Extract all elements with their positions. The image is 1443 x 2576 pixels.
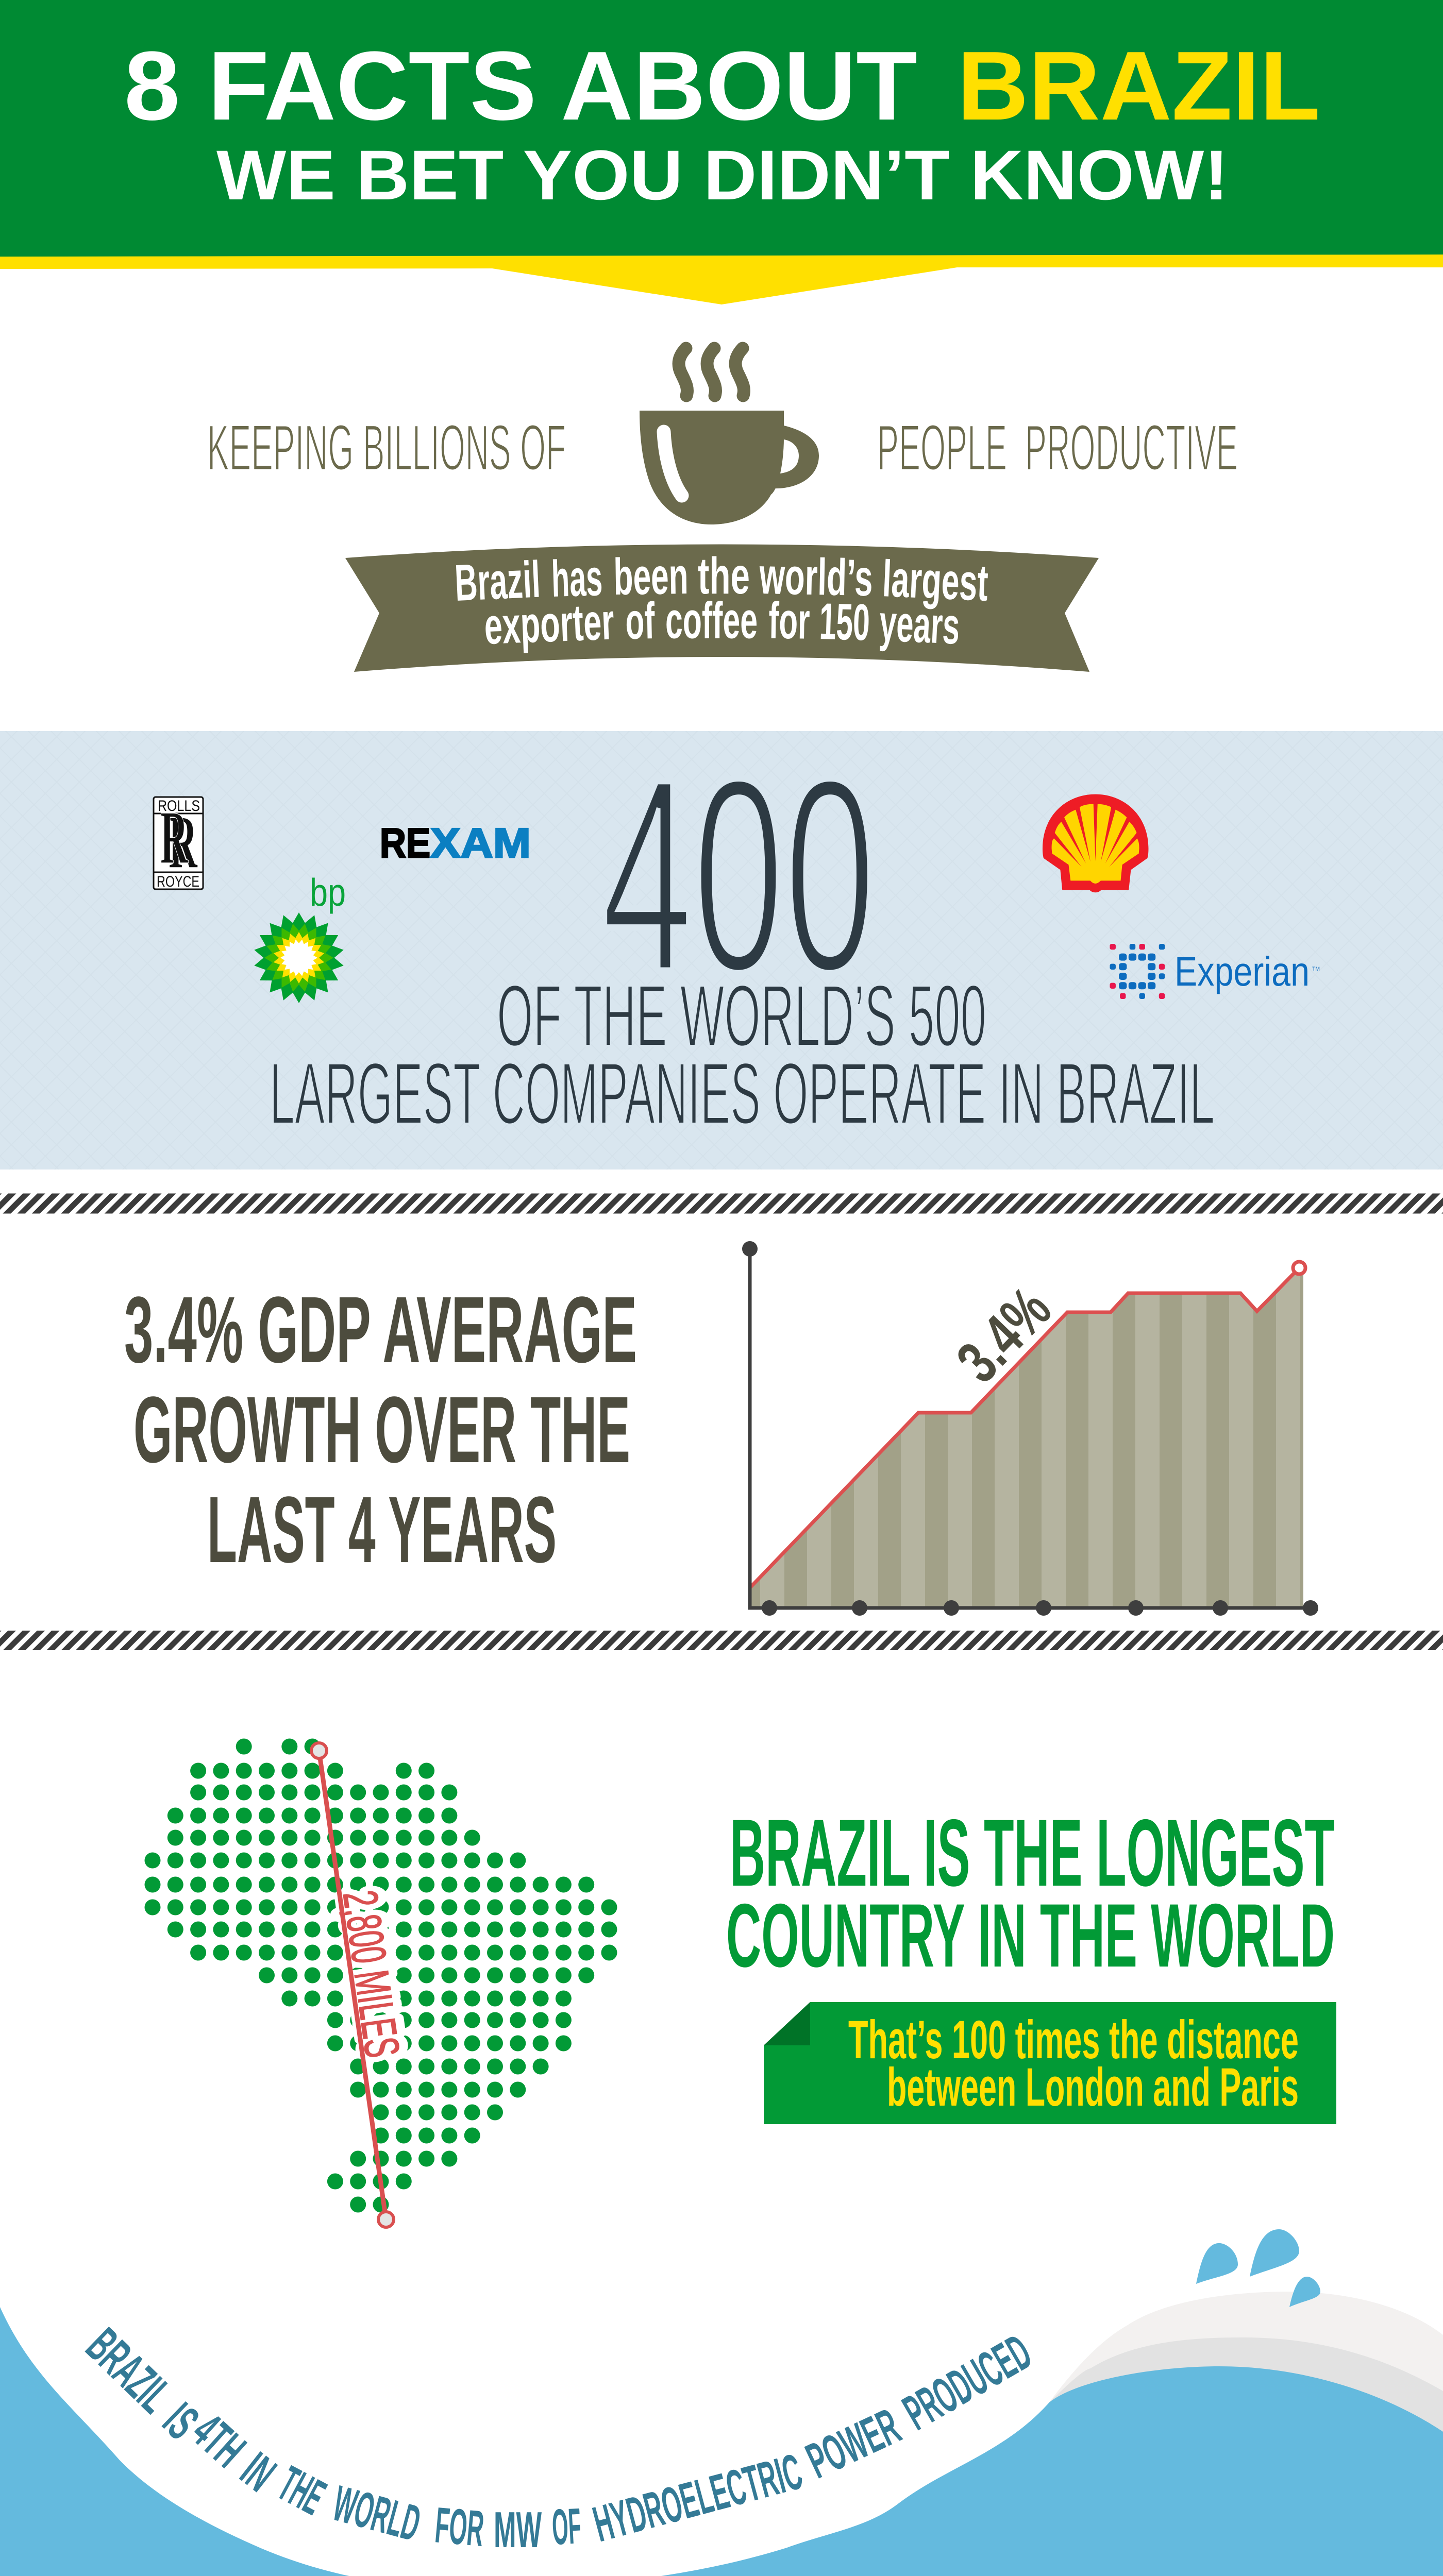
wave foam light layer (1049, 2292, 1443, 2473)
logo: rolls royce: R (169, 800, 198, 885)
banner text line 1 (454, 547, 989, 612)
logo: rolls royce: ROYCE (157, 873, 199, 890)
panel: coffee fact (207, 348, 1238, 672)
curved text: hydroelectric fact: PRODUCED (894, 2323, 1041, 2441)
distance label 2,800 miles: 2,800 MILES (333, 1887, 410, 2061)
curved text: hydroelectric fact: BRAZIL (76, 2317, 183, 2424)
curved text: hydroelectric fact: MW (494, 2501, 542, 2558)
icon: water drops (1196, 2229, 1320, 2307)
banner text line 1: has (550, 549, 603, 608)
curved text: hydroelectric fact: IN (231, 2442, 286, 2502)
banner text line 2 (483, 592, 961, 655)
banner text line 2: exporter (483, 592, 615, 655)
logo: rexam: RE (380, 820, 430, 867)
banner text line 1: world’s (759, 547, 874, 607)
logo: shell (1043, 794, 1148, 892)
logo: experian: Experian (1174, 948, 1310, 994)
logo: rexam (380, 820, 531, 867)
chart line (750, 1268, 1299, 1588)
chart axes (750, 1249, 1311, 1608)
banner text line 2: for (768, 592, 810, 650)
blue wave (0, 2307, 1443, 2576)
curved text: hydroelectric fact: IS (153, 2392, 210, 2450)
dotted map of brazil (153, 1747, 610, 2205)
curved text: hydroelectric fact: THE (270, 2455, 334, 2526)
panel: hydroelectric wave and airports (0, 2229, 1443, 2576)
banner text line 2: of (625, 592, 656, 650)
heading: gdp growth: GROWTH OVER THE (133, 1377, 630, 1482)
curved text: hydroelectric fact (76, 2317, 1041, 2558)
curved text: hydroelectric fact: HYDROELECTRIC (588, 2443, 808, 2552)
icon: coffee cup with steam (640, 348, 819, 524)
green header background (0, 0, 1443, 257)
wave foam grey layer (1049, 2337, 1443, 2473)
banner text line 1: the (698, 547, 750, 605)
banner text line 1: Brazil (454, 551, 542, 612)
chart area (750, 1262, 1303, 1608)
panel: gdp growth (0, 1204, 1443, 1640)
logo: bp: bp (310, 871, 346, 914)
text: keeping billions of: KEEPING BILLIONS OF (207, 412, 566, 484)
heading: gdp growth (124, 1277, 637, 1582)
logo: rolls royce: R (160, 795, 189, 880)
heading: longest country (726, 1800, 1335, 1986)
banner text line 2: years (878, 594, 961, 655)
banner text line 2: coffee (665, 592, 758, 650)
axis dots (742, 1241, 1318, 1616)
banner text line 1: largest (881, 550, 989, 612)
yellow arrow ribbon (0, 252, 1443, 304)
curved text: hydroelectric fact: POWER (798, 2397, 909, 2489)
text: of the world's 500: OF THE WORLD’S 500 (497, 967, 986, 1065)
curved text: hydroelectric fact: WORLD (328, 2475, 426, 2552)
curved text: hydroelectric fact: 4TH (182, 2403, 256, 2478)
heading: gdp growth: 3.4% GDP AVERAGE (124, 1277, 637, 1382)
logo: rexam: XAM (430, 820, 531, 867)
logo: experian: TM (1312, 966, 1320, 972)
title line 1: BRAZIL (957, 31, 1320, 141)
panel: header banner (0, 0, 1443, 304)
title line 2: WE BET YOU DIDN’T KNOW! (216, 136, 1229, 215)
distance line with end markers (311, 1743, 394, 2227)
logo: bp (254, 871, 346, 1003)
title line 1 (124, 31, 1320, 141)
heading: gdp growth: LAST 4 YEARS (207, 1477, 557, 1582)
curved text: hydroelectric fact: FOR (433, 2496, 486, 2557)
logo: experian (1110, 944, 1320, 999)
panel: longest country (153, 1743, 1336, 2227)
banner text line 1: been (613, 547, 689, 606)
logo: rolls royce (154, 795, 203, 890)
ribbon banner with coffee fact (345, 544, 1099, 672)
curved text: hydroelectric fact: OF (550, 2497, 582, 2555)
logo: rolls royce: ROLLS (158, 798, 200, 815)
end marker (1293, 1262, 1305, 1274)
distance label 2,800 miles: 2,800 MILES (333, 1887, 410, 2061)
distance label 2,800 miles (333, 1887, 410, 2061)
big number 400: 400 (601, 722, 876, 1029)
callout: folded green note (764, 2002, 1336, 2124)
banner text line 2: 150 (818, 592, 870, 652)
chart: gdp area chart (742, 1241, 1318, 1616)
panel background (0, 731, 1443, 1170)
panel: 400 companies (0, 722, 1443, 1170)
title line 1: 8 FACTS ABOUT (124, 31, 917, 141)
chart label 3.4%: 3.4% (944, 1275, 1064, 1395)
